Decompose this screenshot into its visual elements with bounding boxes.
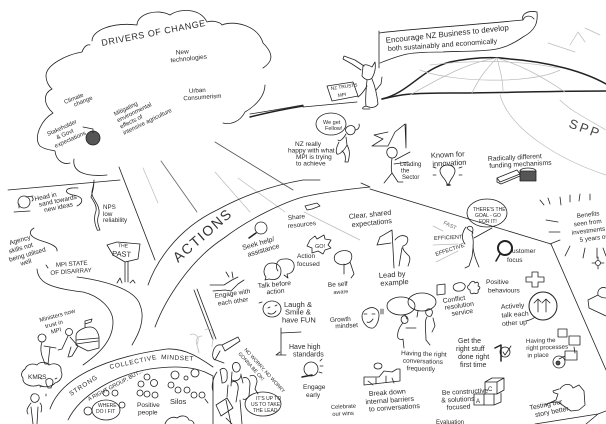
driver: mitigating environmental effects: Mitigating: [113, 101, 139, 118]
action: engage early: Engage: [303, 384, 326, 391]
sign: the past: THE: [118, 243, 129, 250]
driver: urban consumerism: Consumerism: [183, 93, 222, 102]
action: clear shared expectations: expectations: [351, 216, 393, 229]
ministers trust MPI scene: MPI: [50, 327, 63, 336]
speech bubble: it's up to us: THE LEAD: [253, 408, 278, 414]
action: celebrate our wins: Celebrate: [331, 404, 356, 411]
driver: urban consumerism: Urban: [189, 87, 207, 95]
action: be constructive: [441, 378, 504, 412]
action: share resources: resources: [287, 220, 317, 230]
action: engage early: [302, 359, 326, 399]
action: fast efficient effective: EFFICIENT: [434, 234, 463, 242]
sign: the past: PAST: [112, 249, 132, 259]
action: seek help: Seek help/: [242, 236, 275, 252]
speech bubble: it's up to us: IT'S UP TO: [256, 396, 281, 402]
rays from the cloud: [119, 142, 293, 260]
action: testing our story: Testing our: [529, 399, 564, 412]
action: be self aware: aware: [333, 289, 349, 296]
sign: NZ trusts MPI: NZ TRUSTS: [330, 82, 358, 92]
heading: drivers of change: DRIVERS OF CHANGE: [100, 18, 207, 48]
action: action focused: [297, 235, 331, 268]
action: clear shared expectations: Clear, shared: [348, 208, 392, 221]
heading: actions: ACTIONS: [169, 205, 235, 265]
banner text: Encourage NZ Business to develop: [385, 23, 510, 45]
action: actively talk each other up: talk each: [501, 311, 529, 319]
action: actively talk each other up: [501, 292, 557, 328]
action: conflict resolution service: resolution: [444, 301, 475, 312]
action: having the right processes: Having the: [526, 337, 556, 345]
driver: mitigating environmental effects: environmental: [116, 102, 153, 124]
label: leading the sector: Leading: [400, 162, 421, 168]
action: customer focus: [496, 241, 536, 264]
benefits callout: Benefits: [576, 210, 600, 220]
funding mechanisms item: [488, 153, 552, 184]
callout: NZ really happy with MPI: happy with what: [288, 148, 335, 154]
action: having the right conversations: conversations: [403, 358, 444, 366]
text: no worry: NO WORRY, NO WORRY: [243, 347, 286, 395]
label: KMPS: KMPS: [28, 374, 47, 381]
sign: NZ trusts MPI: [327, 82, 358, 101]
cloud outline: [37, 10, 271, 175]
action: get the right stuff done: done right: [458, 354, 489, 361]
action: positive behaviours: behaviours: [488, 288, 521, 294]
problem: agency skills: [4, 228, 57, 270]
problem: agency skills: well: [19, 258, 33, 268]
action: be constructive: A: [476, 399, 480, 405]
speech bubble: we get fellow: [316, 113, 346, 135]
action: laugh smile have fun: [259, 300, 316, 324]
problem: MPI state of disarray: OF DISARRAY: [50, 267, 92, 277]
pole and megaphone figure: [190, 289, 286, 395]
divider bottom right: [535, 411, 606, 424]
group: positive people: [137, 374, 160, 416]
action: celebrate our wins: our wins: [332, 411, 354, 418]
action: be self aware: Be self: [328, 281, 348, 289]
action: growth mindset: [330, 308, 383, 330]
banner: encourage NZ business: [379, 11, 537, 68]
sign: the past: [107, 242, 140, 283]
action: get the right stuff done: Get the: [458, 338, 481, 345]
action: having the right conversations: [387, 293, 447, 374]
sign held: [216, 398, 233, 424]
action: conflict resolution service: [437, 281, 480, 319]
callout: NZ really happy with MPI: [288, 113, 359, 168]
action: customer focus: focus: [507, 257, 523, 264]
action: action focused: Action: [297, 253, 315, 260]
action: having the right processes: right processes: [526, 344, 568, 352]
driver: stakeholder and government expectations: & Govt: [56, 128, 75, 141]
sign: NZ trusts MPI: MPI: [337, 92, 347, 99]
action: having the right processes: [526, 329, 580, 368]
driver: mitigating environmental effects: intensive agriculture: [122, 108, 174, 137]
action: engage with each other: Engage with: [214, 288, 251, 300]
funding mechanisms item: Radically different: [488, 153, 542, 163]
group of people: [212, 362, 281, 424]
problem: head in sand: sand towards: [38, 194, 78, 209]
action: conflict resolution service: service: [451, 308, 474, 318]
cloud: KMPS: [22, 362, 62, 424]
action: growth mindset: mindset: [335, 322, 358, 330]
benefits callout: investments: [571, 226, 606, 237]
funding mechanisms item: funding mechanisms: [489, 160, 552, 170]
action: fast efficient effective: [433, 220, 466, 262]
action: actively talk each other up: Actively: [501, 302, 525, 311]
icon: light bulb: [433, 165, 462, 185]
text: leaders line: GONNA BE OK!: [237, 351, 265, 382]
small cloud bottom: [165, 416, 194, 424]
speech bubble: it's up to us: [245, 392, 281, 416]
arc: strong collective mindset: [50, 349, 213, 424]
problem: agency skills: skills not: [8, 242, 34, 255]
action: having the right conversations: Having the right: [401, 350, 447, 359]
action: having the right conversations: frequently: [406, 365, 436, 373]
action: be constructive: & solutions: [441, 396, 475, 405]
banner text line two: both sustainably and economically: [388, 36, 498, 53]
icon: parliament building: [76, 319, 99, 351]
driver: new technologies: technologies: [170, 54, 208, 64]
action: engage with each other: each other: [217, 296, 250, 308]
label: leading the sector: the: [401, 168, 410, 174]
heading: mindset: MINDSET: [161, 354, 194, 363]
arc: actions band: [148, 180, 606, 370]
speech bubble: there's the goal: [467, 199, 507, 227]
heading: collective: COLLECTIVE: [109, 354, 158, 371]
problem: NPS low reliability: reliability: [103, 217, 128, 224]
action: talk before action: [258, 259, 294, 297]
action: lead by example: [377, 230, 410, 288]
leading the sector: [372, 124, 421, 183]
action: action focused: GO!: [315, 244, 326, 250]
action: have high standards: Have high: [289, 344, 321, 351]
figures shaking hands: [38, 328, 78, 364]
action: break down barriers: to conversations: [369, 403, 421, 414]
action: be self aware: [328, 251, 354, 296]
action: get the right stuff done: right stuff: [456, 346, 485, 353]
action: talk before action: Talk before: [258, 280, 292, 290]
group: positive people: people: [138, 410, 158, 416]
group: where do I fit: DO I FIT: [96, 409, 115, 415]
panel: drivers of change cloud: [37, 10, 271, 175]
action: testing our story: [529, 384, 585, 420]
action: laugh smile have fun: have FUN: [282, 316, 316, 324]
innovation item: Known for: [431, 149, 465, 160]
callout: NZ really happy with MPI: NZ really: [295, 141, 322, 148]
group: where do I fit: [84, 390, 125, 420]
action: lead by example: example: [380, 277, 409, 288]
action: customer focus: ustomer: [512, 248, 536, 255]
innovation item: [431, 149, 467, 185]
stacked icon at right edge: [588, 287, 606, 316]
callout: NZ really happy with MPI: MPI is trying: [296, 154, 332, 161]
action: seek help: assistance: [247, 243, 281, 259]
ministers trust MPI scene: Ministers now: [39, 308, 77, 324]
driver: mitigating environmental effects: effects of: [119, 114, 144, 130]
group: silos: [168, 369, 208, 406]
problem: NPS low reliability: low: [103, 211, 113, 218]
action: having the right processes: in place: [527, 352, 549, 359]
driver: climate change: Climate: [64, 92, 85, 106]
winding road: [37, 265, 142, 365]
driver: climate change: change: [73, 95, 94, 108]
action: share resources: Share: [287, 213, 306, 222]
figure: cheering person: [336, 124, 359, 162]
speech bubble: we get fellow: Fellow!: [325, 126, 343, 132]
action: conflict resolution service: Conflict: [442, 295, 466, 305]
left line and scribble: [8, 180, 120, 230]
action: laugh smile have fun: Smile &: [285, 308, 311, 316]
action: break down barriers: [364, 363, 421, 414]
action: engage early: early: [306, 392, 321, 399]
icon: money: [497, 168, 536, 184]
icon: bulb idea: [40, 378, 57, 396]
action: action focused: focused: [297, 261, 320, 268]
speech bubble: we get fellow: We get: [323, 120, 341, 126]
speech bubble: there's the goal: THERE'S THE: [473, 207, 506, 213]
action: seek help: [242, 222, 281, 260]
action: positive behaviours: [486, 272, 544, 294]
action: fast efficient effective: EFFECTIVE: [435, 243, 466, 258]
problem: MPI state of disarray: MPI STATE: [56, 260, 88, 269]
action: fast efficient effective: FAST: [442, 220, 458, 232]
benefits callout: seen from: [573, 218, 602, 228]
action: break down barriers: internal barriers: [365, 396, 415, 406]
label: leading the sector: Sector: [402, 175, 419, 181]
group: silos: Silos: [170, 397, 187, 406]
problem: head in sand: [14, 187, 80, 216]
ministers trust MPI scene: trust in: [45, 320, 64, 330]
figure holding banner and sign: [327, 56, 382, 109]
action: laugh smile have fun: Laugh &: [284, 300, 312, 309]
problem: agency skills: Agency: [9, 234, 32, 247]
speech bubble: it's up to us: US TO TAKE: [251, 402, 281, 408]
callout: NZ really happy with MPI: to achieve: [296, 160, 326, 168]
figure: below cloud: [27, 394, 42, 424]
problem: head in sand: new ideas: [44, 201, 74, 214]
problem: NPS low reliability: NPS: [103, 204, 116, 211]
group: where do I fit: WHERE: [98, 403, 117, 409]
action: lead by example: Lead by: [379, 269, 406, 280]
driver: stakeholder and government expectations: Stakeholder: [46, 119, 78, 138]
icon: radiating burst: [540, 194, 606, 258]
innovation item: innovation: [432, 158, 467, 168]
action: be constructive: Be constructive: [442, 388, 489, 397]
icon: building: [83, 127, 100, 145]
action: growth mindset: Growth: [330, 316, 351, 324]
action: get the right stuff done: [456, 338, 511, 369]
heading: strong: STRONG: [68, 374, 99, 398]
speech bubble: there's the goal: FOR IT!: [479, 219, 497, 225]
benefits callout: [540, 194, 606, 269]
problem: head in sand: Head in: [34, 191, 58, 203]
driver: stakeholder and government expectations: expectations: [54, 131, 87, 150]
action: share resources: [286, 203, 320, 230]
action: testing our story: story better: [534, 406, 570, 419]
action: have high standards: standards: [293, 352, 324, 358]
group: positive people: Positive: [137, 402, 160, 409]
icon: small sun: [592, 257, 604, 269]
action: engage with each other: [210, 272, 252, 308]
action: goal figure: [462, 199, 507, 268]
action: actively talk each other up: other up: [502, 319, 527, 328]
action: be constructive: C: [488, 387, 493, 393]
ministers trust MPI scene: [38, 308, 99, 364]
action: break down barriers: Break down: [369, 388, 406, 398]
hill and globe: [250, 28, 606, 175]
action: positive behaviours: Positive: [486, 279, 509, 286]
driver: new technologies: New: [175, 48, 189, 57]
action: talk before action: action: [266, 288, 285, 296]
problem: agency skills: being utilised: [8, 246, 47, 264]
action: be constructive: focused: [447, 404, 471, 412]
action: get the right stuff done: first time: [460, 362, 487, 369]
text: a right group but: A RIGHT GROUP, BUT...: [87, 369, 144, 403]
speech bubble: there's the goal: GOAL - GO: [475, 213, 501, 219]
action: have high standards: [276, 328, 324, 358]
